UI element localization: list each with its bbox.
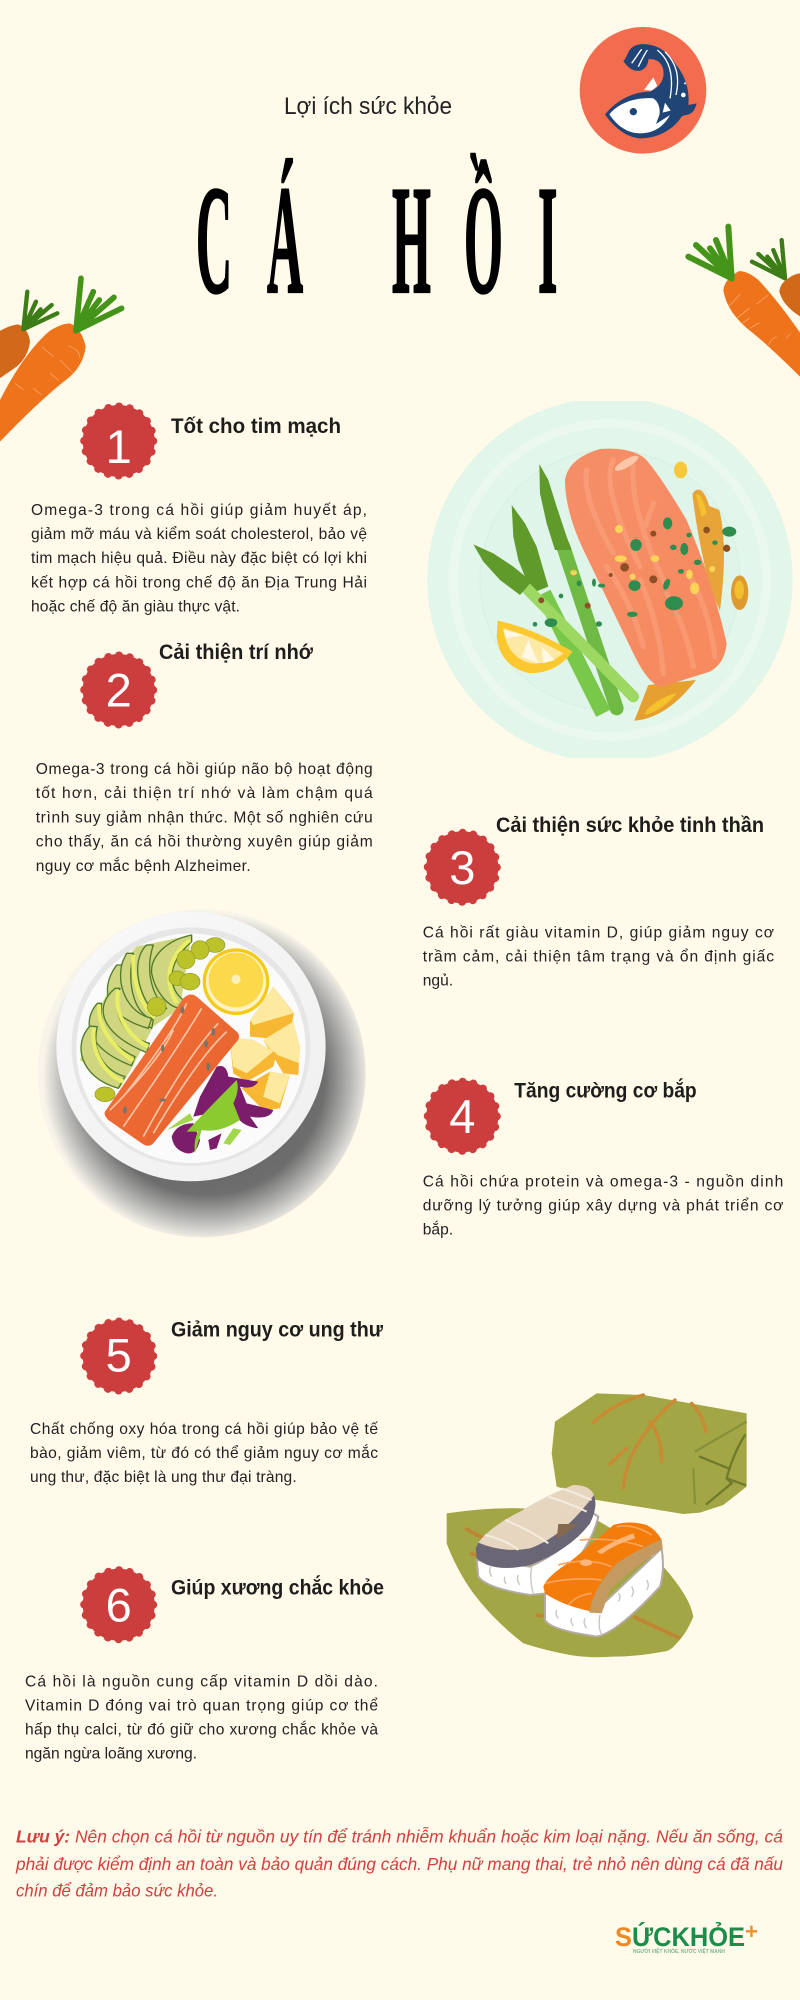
logo: Sức Khỏe+: + [745, 1919, 758, 1944]
text block 6: ngăn ngừa loãng xương. [25, 1746, 197, 1763]
text block 2: nguy cơ mắc bệnh Alzheimer. [36, 856, 251, 875]
text block 4: dưỡng lý tưởng giúp xây dựng và phát triển cơ [423, 1197, 783, 1215]
salmon sushi [543, 1522, 663, 1637]
badge 1: 1 [106, 420, 132, 473]
text block 2: cho thấy, ăn cá hồi thường xuyên giúp giảm [36, 834, 373, 850]
text block 2: tốt hơn, cải thiện trí nhớ và làm chậm quá [36, 785, 373, 802]
mackerel sushi [476, 1485, 598, 1595]
avocado highlights [93, 940, 190, 1082]
text block 1: tim mạch hiệu quả. Điều này đặc biệt có lợi khi [31, 550, 367, 567]
lemon wedge [497, 621, 573, 673]
illustration: salmon plate with asparagus [427, 397, 793, 763]
plate [427, 397, 793, 763]
icon: salmon logo badge [580, 27, 706, 154]
salmon fillet [105, 995, 239, 1146]
avocado slices [81, 935, 192, 1088]
text block 1: giảm mỡ máu và kiểm soát cholesterol, bảo vệ [31, 525, 367, 543]
text block 4: Cá hồi chứa protein và omega-3 - nguồn dinh [423, 1174, 783, 1191]
icon: left carrots [0, 278, 122, 442]
orange carrot right [688, 227, 800, 378]
salmon fillet [565, 449, 727, 687]
text block 5 [30, 1421, 378, 1486]
text block 2: Omega-3 trong cá hồi giúp não bộ hoạt động [36, 761, 373, 778]
text block 3: Cá hồi rất giàu vitamin D, giúp giảm nguy cơ [423, 925, 774, 942]
callout: note [15, 1827, 783, 1901]
text block 1: hoặc chế độ ăn giàu thực vật. [31, 598, 240, 616]
icon: right carrots [688, 227, 800, 378]
text block 4: bắp. [423, 1220, 453, 1239]
text block 3: trầm cảm, cải thiện tâm trạng và ổn định giấc [423, 948, 774, 966]
lemon slice [203, 948, 269, 1015]
badge 2 [83, 654, 155, 726]
logo: Sức Khỏe+: NGƯỜI VIỆT KHỎE, NƯỚC VIỆT MẠNH [633, 1947, 725, 1955]
subtitle: Lợi ích sức khỏe [284, 93, 452, 120]
olives [95, 938, 225, 1102]
text block 3 [423, 925, 774, 990]
badge 1 [83, 405, 155, 477]
text block 5: ung thư, đặc biệt là ung thư đại tràng. [30, 1469, 297, 1486]
text block 6: hấp thụ calci, từ đó giữ cho xương chắc khỏe và [25, 1720, 378, 1739]
text block 1: Omega-3 trong cá hồi giúp giảm huyết áp, [31, 502, 367, 519]
heading 3: Cải thiện sức khỏe tinh thần [496, 814, 764, 837]
heading 2: Cải thiện trí nhớ [159, 641, 313, 664]
text block 6 [25, 1674, 378, 1763]
logo: Sức Khỏe+: SỨCKHỎE [615, 1920, 745, 1952]
panel: benefit 6 [25, 1569, 384, 1763]
text block 1: kết hợp cá hồi trong chế độ ăn Địa Trung Hải [31, 574, 367, 592]
dark carrot right [752, 240, 800, 317]
asparagus [473, 464, 633, 713]
herbs and pepper [533, 517, 736, 627]
badge 6 [83, 1569, 155, 1641]
text block 3: ngủ. [423, 973, 453, 990]
heading 1: Tốt cho tim mạch [171, 415, 341, 438]
heading 6: Giúp xương chắc khỏe [171, 1576, 384, 1600]
text block 5: Chất chống oxy hóa trong cá hồi giúp bảo vệ tế [30, 1421, 378, 1438]
callout: note: Lưu ý: Nên chọn cá hồi từ nguồn uy tín để tránh nhiễm khuẩn hoặc kim loại nặng. Nếu ăn sống, cá [16, 1827, 783, 1847]
badge 2: 2 [106, 664, 132, 717]
panel: benefit 1 [31, 405, 367, 616]
avocado base [80, 935, 192, 1088]
orange carrot left [0, 278, 122, 442]
callout: note: chín để đảm bảo sức khỏe. [16, 1881, 218, 1901]
dark carrot left [0, 292, 57, 379]
callout: note: phải được kiểm định an toàn và bảo quản đúng cách. Phụ nữ mang thai, trẻ nhỏ nên dùng cá đã nấu [15, 1854, 783, 1874]
badge 5 [83, 1320, 155, 1392]
badge 5: 5 [106, 1329, 132, 1382]
illustration: salmon bowl with avocado, lemon and pineapple [38, 909, 366, 1237]
text block 1 [31, 502, 367, 616]
badge 6: 6 [106, 1578, 132, 1632]
panel: benefit 4 [423, 1078, 783, 1239]
text block 2 [36, 761, 373, 875]
sauce [634, 462, 748, 721]
badge 3: 3 [449, 841, 475, 894]
text block 6: Vitamin D đóng vai trò quan trọng giúp cơ thể [25, 1697, 378, 1715]
front leaf [447, 1508, 693, 1657]
illustration: salmon sushi on leaves [447, 1393, 747, 1657]
panel: benefit 2 [36, 641, 373, 875]
text block 2: trình suy giảm nhận thức. Một số nghiên cứu [36, 810, 373, 826]
text block 4 [423, 1174, 783, 1239]
salad leaves [167, 1066, 273, 1153]
heading 4: Tăng cường cơ bắp [514, 1078, 697, 1102]
heading 5: Giảm nguy cơ ung thư [171, 1319, 384, 1342]
white plate [56, 912, 326, 1181]
panel: benefit 3 [423, 814, 774, 990]
title: CÁ HỒI [196, 153, 557, 326]
text block 5: bào, giảm viêm, từ đó có thể giảm nguy cơ mắc [30, 1443, 378, 1462]
plate shadow [38, 909, 366, 1237]
badge 4 [426, 1080, 498, 1152]
text block 6: Cá hồi là nguồn cung cấp vitamin D dồi dào. [25, 1674, 378, 1691]
badge 4: 4 [449, 1090, 475, 1143]
badge 3 [426, 831, 498, 903]
pineapple chunks [229, 987, 300, 1110]
back leaf [552, 1393, 747, 1514]
panel: benefit 5 [30, 1319, 384, 1486]
